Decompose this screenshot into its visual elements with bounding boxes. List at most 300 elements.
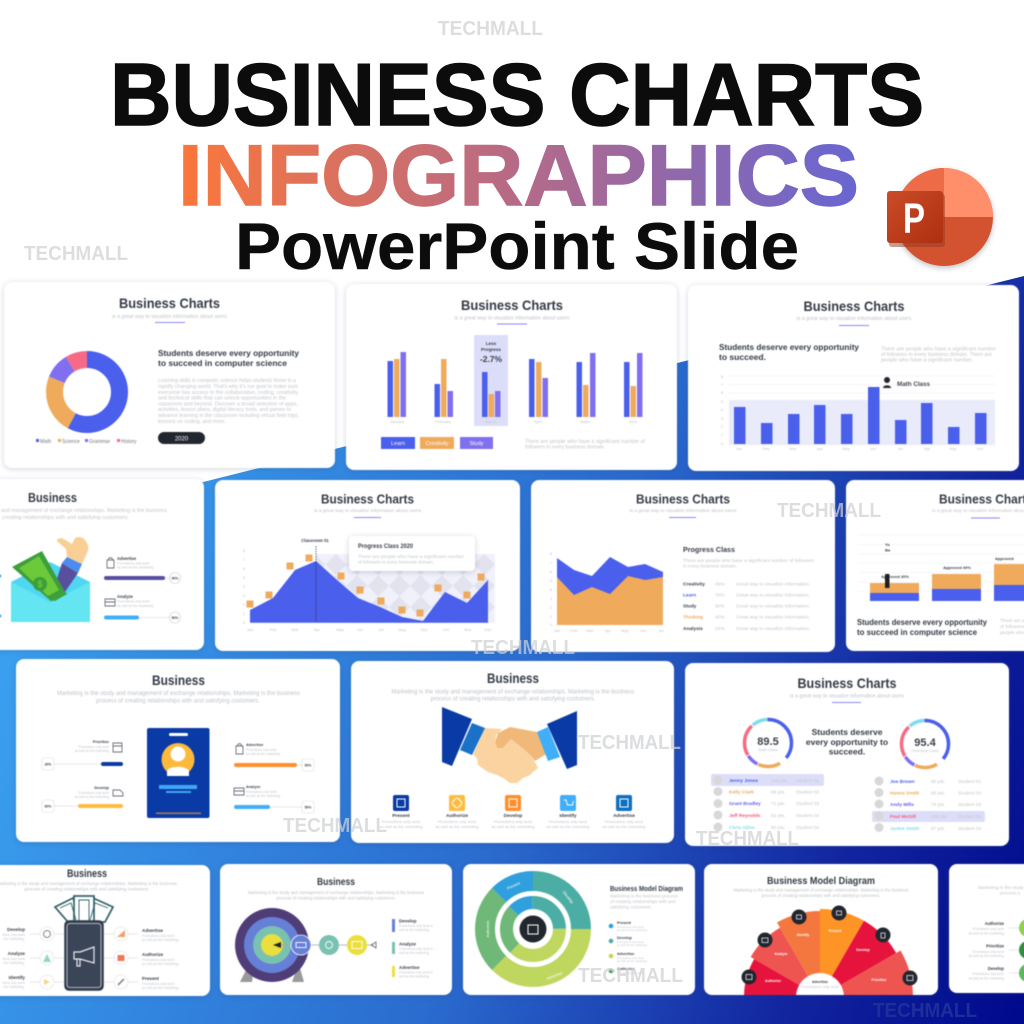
slide subtitle <box>734 888 909 898</box>
advertise progress: Advertise <box>117 556 137 561</box>
analyze progress <box>234 785 314 813</box>
student table left: Grant Bradley <box>729 801 761 807</box>
area chart <box>250 561 488 623</box>
diagram heading: Business Model Diagram <box>610 884 683 893</box>
slide subtitle: is a great way to visualize information about users <box>630 508 737 514</box>
identify item: Identify <box>559 813 577 819</box>
id badge illustration <box>147 728 210 818</box>
axis labels: Mar <box>292 627 299 632</box>
paragraph: advance learning in the classroom including virtual field trips, <box>158 413 299 419</box>
axis labels: 4 <box>550 587 553 592</box>
analyze progress: Promotions only work <box>117 600 150 604</box>
student table left: 80 pts. <box>771 825 785 831</box>
diagram legend: Develop <box>617 936 632 940</box>
donut legend: History <box>121 439 137 445</box>
left items: Identify <box>9 975 25 980</box>
slide heading: Business Charts <box>321 492 414 506</box>
score ring left: Math Class <box>758 747 778 752</box>
legend buttons <box>381 437 493 449</box>
list items: Prioritize <box>986 944 1005 948</box>
fan chart: Develop <box>856 948 870 952</box>
slide heading: Business <box>317 876 355 888</box>
axis labels: Apr <box>817 446 824 451</box>
diagram legend: as well as the marketing <box>617 943 647 947</box>
blue gradient background <box>0 276 1024 1024</box>
present item <box>380 795 422 829</box>
prioritize progress <box>42 740 123 770</box>
analyze progress: Analyze <box>117 594 133 599</box>
left items: tions only work <box>3 981 25 985</box>
axis labels <box>550 551 664 633</box>
authorize item: Authorize <box>446 813 468 819</box>
student table left: Student 04 <box>796 813 820 819</box>
left items: Develop <box>7 927 25 932</box>
student table right <box>872 776 985 832</box>
analyze progress: 50% <box>305 806 311 810</box>
slide subtitle: process of creating relationships with and satisfying customers. <box>762 893 880 898</box>
student table right: Student 01 <box>958 779 982 785</box>
axis labels: 6 <box>243 566 246 571</box>
slide heading: Business <box>28 491 77 505</box>
slide: id badge <box>16 659 340 842</box>
identify item: as well as the marketing <box>547 824 589 829</box>
donut chart <box>54 360 120 424</box>
fan chart: Authorize <box>765 979 781 983</box>
ring diagram: Advertise <box>546 970 564 981</box>
right items: Promotions only work <box>142 934 175 938</box>
student table right: 100 pts. <box>931 814 948 820</box>
develop item: Develop <box>504 813 522 819</box>
month labels: February <box>435 419 451 424</box>
slide heading: Business Charts <box>119 295 220 311</box>
axis labels: Nov <box>464 627 472 632</box>
bar labels: Approved <box>995 556 1014 561</box>
slide subtitle: Marketing is the study and management of exchange relationships. Marketing is the business <box>392 690 634 696</box>
prioritize progress: as well as the marketing <box>75 749 109 753</box>
student table right: Andy Mills <box>890 802 914 808</box>
edge dots <box>0 574 2 618</box>
slide: partial list right <box>949 864 1024 993</box>
analyze progress: as well as the marketing <box>246 794 280 798</box>
paragraph: everyone has access to the collaborative, coding, creativity, <box>158 390 299 396</box>
slide: grouped bar chart <box>346 284 677 470</box>
axis labels: 6 <box>550 569 553 574</box>
diagram legend: Authorize <box>617 967 635 971</box>
stacked area chart <box>557 557 663 625</box>
axis labels: May <box>336 627 344 632</box>
left items: Analyze <box>8 951 25 956</box>
right items: as well as the marketing. <box>142 938 179 942</box>
left items <box>3 927 64 989</box>
diagram legend: Promotions only work <box>617 940 644 944</box>
present item: as well as the marketing <box>380 824 422 829</box>
authorize item <box>436 795 478 829</box>
callout: Progress Class 2020 <box>358 543 413 550</box>
score ring right: Chemical Class <box>911 748 939 753</box>
diagram legend: Advertise <box>617 952 634 956</box>
advertise progress: Promotions only work <box>246 748 277 752</box>
list items: Develop <box>988 966 1004 971</box>
ring diagram: Develop <box>562 890 575 905</box>
diagram legend <box>609 921 647 975</box>
donut legend <box>36 439 137 445</box>
right items <box>104 927 179 990</box>
student table right: 85 pts. <box>931 790 945 796</box>
slide: phone and money <box>0 865 210 996</box>
center statement: Students deserve <box>812 727 883 737</box>
slide: student score rings <box>685 663 1009 846</box>
advertise progress <box>234 743 314 771</box>
axis labels <box>721 374 984 451</box>
title: business charts: BUSINESS CHARTS <box>110 45 924 144</box>
diagram legend: Promotions only work <box>617 925 644 929</box>
checker background <box>316 554 495 623</box>
watermarks: TECHMALL <box>777 500 881 522</box>
slide subtitle <box>57 691 300 704</box>
axis labels: Jul <box>658 628 664 633</box>
student table left: Kelly Clark <box>729 790 754 796</box>
present item: Promotions only work <box>382 819 420 824</box>
slide: donut chart <box>4 282 335 468</box>
diagram legend: Present <box>617 921 632 925</box>
bar chart <box>729 387 995 445</box>
progress table: 50% <box>715 604 725 610</box>
axis labels: Feb <box>571 628 578 633</box>
title: powerpoint slide: PowerPoint Slide <box>235 209 799 283</box>
student table right: Student 04 <box>958 814 982 820</box>
develop progress: as well as the marketing <box>75 795 109 799</box>
slide: ring diagram <box>463 864 695 995</box>
month labels: Mayo <box>580 419 591 424</box>
slide subtitle: process of creating relationships with and satisfying customers. <box>276 896 396 902</box>
axis labels: 3 <box>243 593 246 598</box>
right items: Advertise <box>142 928 163 933</box>
slide subtitle: Marketing is the study and management of exchange relationships. Marketing is the business <box>248 890 425 896</box>
axis labels: Feb <box>763 446 770 451</box>
progress table: Great way to visualize information. <box>736 626 810 632</box>
march highlight <box>474 335 508 426</box>
list items: Promotions only work <box>972 972 1004 976</box>
axis labels: 4 <box>721 407 724 412</box>
slide subtitle <box>0 881 178 892</box>
authorize item: as well as the marketing <box>436 824 478 829</box>
axis labels: Oct <box>443 627 450 632</box>
callout: of followers in every business domain. <box>358 560 434 564</box>
donut legend: Science <box>62 439 80 445</box>
target legend: Promotions only work in <box>399 924 433 928</box>
fan chart: Prioritize <box>872 978 887 982</box>
axis labels: May <box>621 628 629 633</box>
student table left: Student 03 <box>796 801 820 807</box>
axis labels: Aug <box>398 627 406 632</box>
slide subtitle: process of creating relationships with and satisfying customers. <box>24 886 150 892</box>
student table left: Student 02 <box>796 790 820 796</box>
axis labels: 6 <box>721 390 724 395</box>
axis labels: 8 <box>243 548 246 553</box>
slide: progress class area chart <box>215 480 520 651</box>
advertise progress: 90% <box>305 764 311 768</box>
list items: Authorize <box>985 921 1005 926</box>
analyze progress: 50% <box>172 616 178 620</box>
march highlight: -2.7% <box>480 354 503 364</box>
slide subtitle: and management of exchange relationships. Marketing is the business <box>1 508 167 514</box>
left items: the marketing. <box>4 937 25 941</box>
march highlight: Progress <box>481 347 501 352</box>
watermarks: TECHMALL <box>578 732 681 754</box>
progress table: 70% <box>715 592 725 598</box>
illustration: money in envelope <box>11 537 90 622</box>
axis labels: Jan <box>554 628 560 633</box>
fan icons <box>742 906 918 986</box>
progress table: Great way to visualize information. <box>736 614 810 620</box>
slide heading: Business Model Diagram <box>767 875 875 887</box>
prioritize progress: Promotions only work <box>79 745 109 749</box>
axis labels: Dec <box>484 627 492 632</box>
right items: Promotions only work <box>142 982 175 986</box>
paragraph: of followers <box>1000 624 1024 630</box>
diagram description: satisfying customers. <box>610 904 652 910</box>
handshake illustration <box>442 707 577 783</box>
text heading: to succeed in computer science <box>857 627 977 637</box>
target illustration <box>235 908 374 982</box>
list items: Promotions only work <box>972 950 1004 954</box>
analyze progress: as well as the marketing <box>117 604 153 608</box>
ring diagram: Authorize <box>485 920 490 937</box>
month labels: April <box>534 419 542 424</box>
icon: powerpoint logo <box>887 168 993 266</box>
diagram description <box>610 894 679 910</box>
paragraph: Learning skills in computer science helps students thrive in a <box>158 378 296 384</box>
axis labels: 7 <box>721 382 724 387</box>
student table left: 86 pts. <box>771 790 785 796</box>
fan chart: Present <box>829 929 842 933</box>
student table left: 100 pts. <box>771 778 788 784</box>
list items <box>969 919 1024 982</box>
watermarks: TECHMALL <box>283 815 387 837</box>
bar labels: Approved 30% <box>881 574 909 579</box>
axis labels: Jul <box>897 446 903 451</box>
advertise progress: 90% <box>172 576 178 580</box>
prioritize progress: 30% <box>45 762 51 766</box>
paragraph: in every business domain. <box>683 564 737 570</box>
diagram legend: Promotions only work <box>617 971 644 975</box>
paragraph <box>881 346 996 364</box>
axis labels <box>243 548 492 632</box>
right items: as well as the marketing. <box>142 986 179 990</box>
axis labels: Mar <box>587 628 594 633</box>
legend buttons: Creativity <box>426 441 449 447</box>
paragraph: activities, lesson plans, digital literacy tools, and games to <box>158 407 291 413</box>
axis labels: 0 <box>243 620 246 625</box>
score ring left: 89.5 <box>757 736 779 748</box>
axis labels: Jul <box>378 627 384 632</box>
student table right: 80 pts. <box>931 779 945 785</box>
student table right: 97 pts. <box>931 826 945 832</box>
fan chart: Advertise <box>812 980 828 984</box>
present item: Present <box>392 813 410 819</box>
left items: the marketing. <box>4 985 25 989</box>
develop progress: Develop <box>94 786 110 790</box>
axis labels: 7 <box>550 560 553 565</box>
develop progress: Promotions only work <box>79 791 109 795</box>
advertise progress: as well as the marketing <box>246 752 280 756</box>
student table right: Student 02 <box>958 790 982 796</box>
axis labels: Jan <box>736 446 742 451</box>
diagram description: of creating relationships with and <box>610 899 676 904</box>
year button <box>158 432 205 444</box>
center statement: succeed. <box>829 746 865 756</box>
paragraph: and technical skills that can unlock opportunities in the <box>158 396 286 402</box>
slide subtitle: is a great way to visualize information about users <box>790 694 904 700</box>
analyze progress: Analyze <box>246 785 260 789</box>
bar labels: Ba <box>885 548 891 552</box>
axis labels: Sep <box>949 446 957 451</box>
right items: Present <box>142 976 159 981</box>
fan chart <box>743 908 914 996</box>
slide: target <box>220 864 452 995</box>
watermarks: TECHMALL <box>578 965 683 987</box>
slide: fan diagram <box>703 863 939 996</box>
slide: money envelope <box>0 479 204 650</box>
student table right: Hanna Smith <box>890 790 919 796</box>
text heading: to succeed in computer science <box>158 358 287 368</box>
right items: Promotions only work <box>142 958 175 962</box>
slide subtitle <box>1 508 167 521</box>
slide heading: Business <box>67 868 107 880</box>
value tags <box>246 554 484 616</box>
develop progress: 60% <box>45 804 51 808</box>
slide: math class bars <box>688 285 1019 471</box>
paragraph <box>158 378 299 425</box>
slide subtitle: Marketing is the study and management of exchange relationships. Marketing is the business <box>57 691 300 697</box>
fan chart: Promotions only work <box>801 984 839 989</box>
axis labels: 8 <box>721 374 724 379</box>
progress table: Analysis <box>683 626 703 632</box>
axis labels: 1 <box>550 614 553 619</box>
score ring right <box>902 720 948 768</box>
callout: There are people who have a significant number <box>358 554 464 559</box>
progress table: Great way to visualize information. <box>736 582 810 588</box>
axis labels: 1 <box>721 432 724 437</box>
illustration: phone with banknotes <box>55 896 113 990</box>
advertise progress <box>104 556 180 584</box>
axis labels: Sep <box>420 627 428 632</box>
axis labels: 2 <box>721 424 724 429</box>
donut legend: Grammar <box>89 439 110 445</box>
text heading <box>719 342 859 362</box>
axis labels: Agt <box>924 446 931 451</box>
axis labels: Jan <box>247 627 253 632</box>
axis labels: 1 <box>243 611 246 616</box>
axis labels: May <box>842 446 850 451</box>
target legend: Advertise <box>399 965 420 970</box>
target legend: Promotions only work in <box>399 947 433 951</box>
bar labels: Yo <box>885 542 890 547</box>
math class label: Math Class <box>897 381 930 388</box>
marker line <box>301 538 329 622</box>
identify item: Promotions only work <box>549 819 587 824</box>
target legend: Promotions only work in <box>399 970 433 974</box>
student table right: Jackie Smith <box>890 826 919 832</box>
title: infographics: INFOGRAPHICS <box>178 128 859 224</box>
callout <box>349 536 475 571</box>
target legend: Analyze <box>399 942 417 946</box>
student table left: Student 04 <box>796 825 820 831</box>
axis labels: Oct <box>977 446 984 451</box>
target legend: well as the marketing. <box>399 974 430 978</box>
score ring right: 95.4 <box>914 737 937 749</box>
math class label <box>883 377 930 388</box>
slide heading: Business Charts <box>461 297 563 313</box>
legend buttons: Study <box>469 441 484 447</box>
axis labels: Feb <box>270 627 277 632</box>
paragraph: of followers in every business domain. There are <box>881 352 992 358</box>
paragraph <box>683 558 815 570</box>
axis labels: 8 <box>550 551 553 556</box>
student table right: Student 03 <box>958 802 982 808</box>
analyze progress: Promotions only work <box>246 790 277 794</box>
advertise progress: Promotions only work <box>117 562 150 566</box>
paragraph: lessons on coding, and more. <box>158 419 226 425</box>
legend buttons: Learn <box>391 441 405 447</box>
paragraph: classroom and beyond. Discover a broad selection of apps, <box>158 402 298 408</box>
slide: stacked area chart <box>531 480 835 652</box>
axis labels: 5 <box>721 399 724 404</box>
diagram legend: as well as the marketing <box>617 928 647 932</box>
paragraph: people who <box>1000 630 1024 636</box>
text heading: Students deserve every opportunity <box>857 617 987 627</box>
stacked bars <box>870 564 1024 601</box>
month labels: June <box>629 419 638 424</box>
list items: as well as the marketing <box>969 954 1004 958</box>
advertise progress: as well as the marketing <box>117 566 153 570</box>
advertise item: Promotions only work <box>605 819 643 824</box>
paragraph: rapidly changing world. That's why it's our goal to make sure <box>158 384 298 390</box>
develop item: Promotions only work <box>494 819 532 824</box>
slide heading: Business Charts <box>636 492 730 506</box>
advertise item: as well as the marketing <box>603 824 645 829</box>
slide subtitle: is a great way to visualize information about users <box>314 508 422 514</box>
year button: 2020 <box>175 436 189 442</box>
student table right: Student 04 <box>958 826 982 832</box>
student table left: Jeff Reynolds <box>729 813 761 819</box>
student table left: 72 pts. <box>771 801 785 807</box>
slide subtitle: Marketing is the study and management of exchange relationships. Marketing is the business <box>734 888 909 892</box>
student table left: Student 01 <box>796 778 820 784</box>
slide subtitle <box>978 885 1024 896</box>
left items: tions only work <box>3 957 25 961</box>
axis labels: Jun <box>870 446 876 451</box>
progress table: Study <box>683 604 697 610</box>
slide subtitle: process of creating relationships with and satisfying customers. <box>430 696 596 702</box>
advertise progress: Advertise <box>246 743 263 747</box>
student table left: Chris Glins <box>729 825 755 831</box>
axis labels: 0 <box>550 622 553 627</box>
month labels <box>390 419 638 424</box>
watermarks: TECHMALL <box>873 1000 977 1022</box>
right items: Authorize <box>142 952 164 957</box>
axis labels: 5 <box>550 578 553 583</box>
analyze progress <box>104 594 180 623</box>
axis labels: 3 <box>550 596 553 601</box>
marker line: Classroom 01 <box>301 538 329 543</box>
identify item <box>547 795 589 829</box>
student table right: 79 pts. <box>931 802 945 808</box>
left items: tions only work <box>3 933 25 937</box>
develop item <box>492 795 534 829</box>
watermarks: TECHMALL <box>24 243 128 265</box>
student table left: 91 pts. <box>771 813 785 819</box>
